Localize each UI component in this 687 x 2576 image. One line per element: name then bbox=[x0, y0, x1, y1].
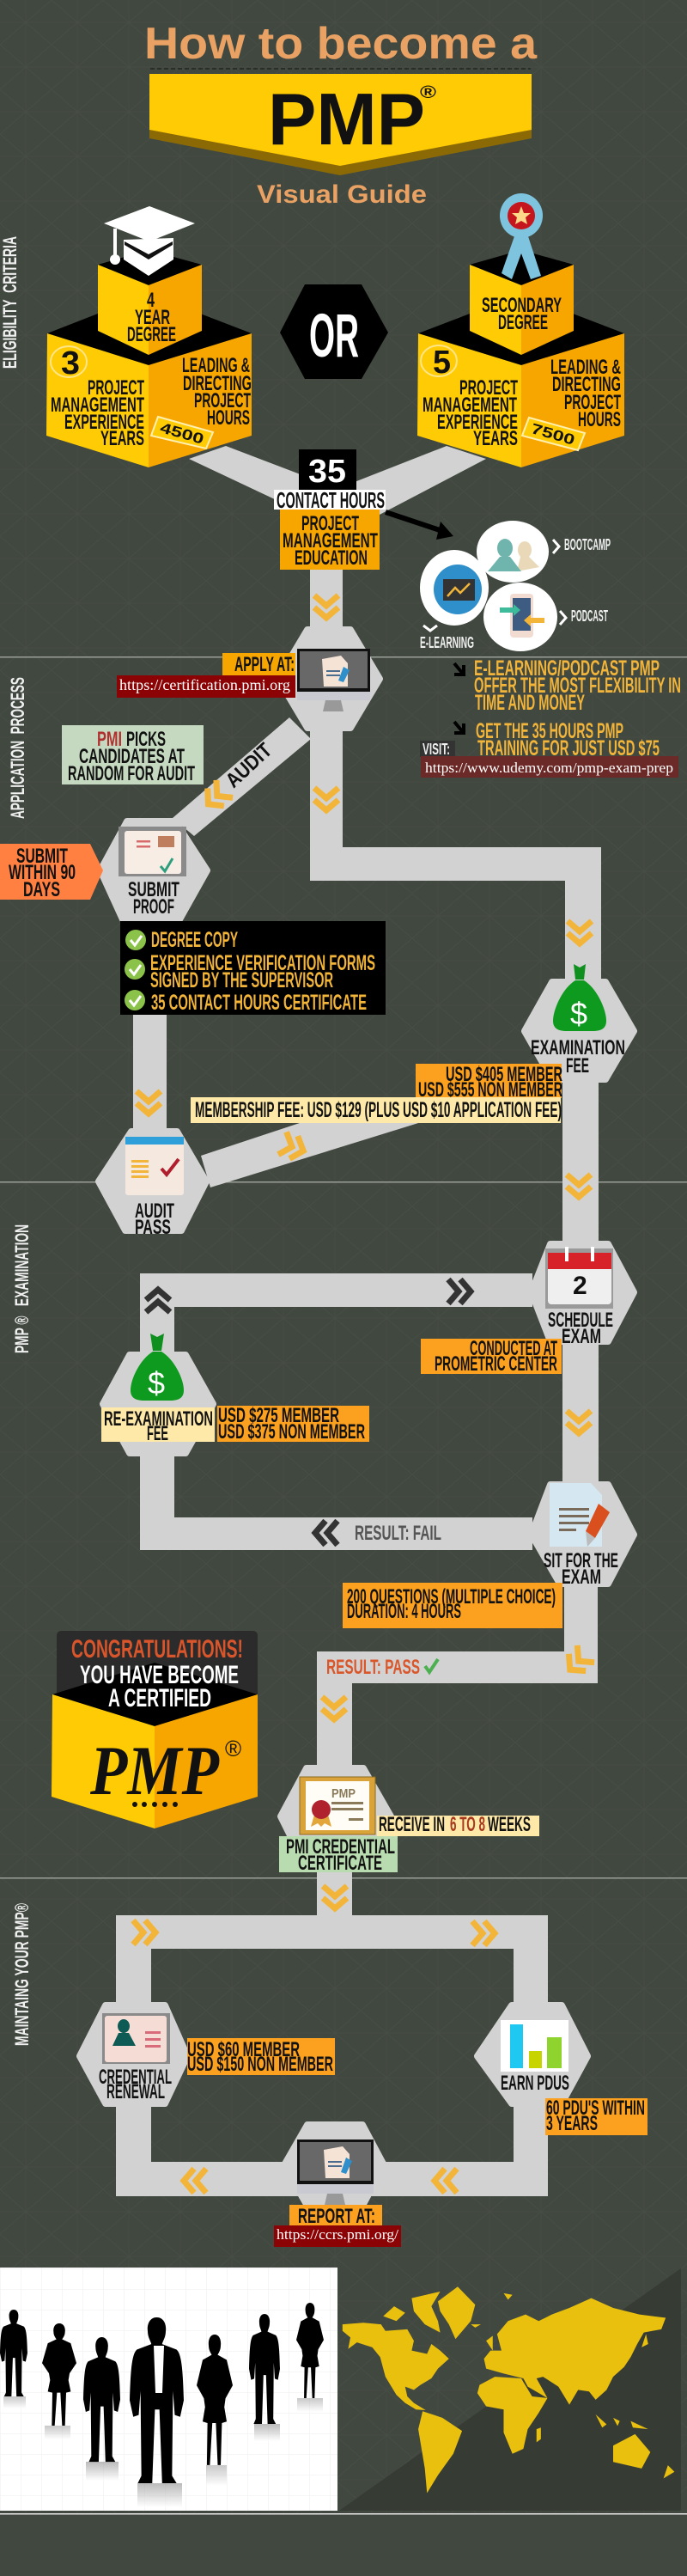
training price note bbox=[454, 719, 660, 760]
hexagon: sit for the exam bbox=[532, 1485, 634, 1584]
cube: secondary degree path: EXPERIENCE bbox=[437, 411, 518, 434]
icon: re-exam money bag: $ bbox=[148, 1365, 165, 1401]
or hexagon: OR bbox=[309, 302, 359, 370]
receive in 6 to 8 weeks box: WEEKS bbox=[488, 1813, 531, 1836]
road: maintenance loop bbox=[116, 1915, 548, 2196]
cube: 4 year degree path: EXPERIENCE bbox=[64, 411, 144, 434]
credential renewal label: RENEWAL bbox=[106, 2080, 165, 2103]
PDU requirement box bbox=[545, 2097, 647, 2135]
cube: 4 year degree path: PROJECT bbox=[88, 376, 144, 400]
ccrs url: https://ccrs.pmi.org/ bbox=[277, 2226, 398, 2243]
road: audit pass to fee bbox=[201, 1117, 438, 1187]
schedule exam label bbox=[548, 1309, 613, 1348]
flexibility note bbox=[454, 656, 681, 715]
audit note box: RANDOM FOR AUDIT bbox=[68, 762, 195, 785]
arrow to training options bbox=[386, 512, 453, 540]
or hexagon bbox=[280, 284, 388, 379]
icon: podcast phone bbox=[500, 594, 544, 638]
congratulations badge: YOU HAVE BECOME bbox=[80, 1661, 239, 1689]
audit note box: CANDIDATES AT bbox=[79, 745, 185, 768]
cube: 4 year degree path: DEGREE bbox=[127, 323, 176, 346]
cube: 4 year degree path: 3 bbox=[61, 345, 80, 382]
receive in 6 to 8 weeks box: 6 TO 8 bbox=[450, 1813, 485, 1836]
chevrons: pass down bbox=[322, 1697, 346, 1719]
chevrons: fee to schedule bbox=[567, 1175, 591, 1197]
hexagon: submit proof bbox=[100, 821, 207, 919]
congratulations badge: PMP bbox=[89, 1731, 220, 1810]
audit pass label bbox=[135, 1199, 174, 1239]
training options cluster bbox=[420, 521, 611, 651]
visit label: VISIT: bbox=[423, 741, 450, 758]
report at label: REPORT AT: bbox=[298, 2205, 375, 2228]
cube: 4 year degree path: YEAR bbox=[135, 306, 170, 329]
congratulations badge: A CERTIFIED bbox=[108, 1684, 211, 1712]
certification url: https://certification.pmi.org bbox=[119, 676, 290, 693]
result fail label: RESULT: FAIL bbox=[355, 1522, 441, 1545]
chevrons: loop top left bbox=[133, 1920, 155, 1944]
cube: secondary degree path: 5 bbox=[433, 345, 451, 381]
icon: submit proof document bbox=[119, 827, 186, 876]
chevrons: retake right bbox=[448, 1279, 471, 1303]
credential renewal label bbox=[99, 2066, 172, 2103]
icon: computer monitor bbox=[297, 649, 370, 711]
subtitle: Visual Guide: Visual Guide bbox=[257, 180, 427, 209]
hexagon: re-examination fee bbox=[103, 1355, 213, 1453]
cube: secondary degree path: YEARS bbox=[473, 427, 518, 450]
road: audit diagonal bbox=[173, 717, 311, 836]
icon: ribbon rosette bbox=[500, 193, 543, 279]
audit note box: PMI bbox=[97, 728, 122, 751]
submit within 90 days tag: DAYS bbox=[23, 878, 60, 901]
chevrons: audit pass to fee bbox=[278, 1132, 307, 1163]
exam fee box bbox=[416, 1063, 562, 1102]
submit within 90 days tag bbox=[0, 844, 103, 901]
cube: 4 year degree path: 4500 bbox=[158, 419, 205, 448]
cube: 4 year degree path: YEARS bbox=[100, 427, 144, 450]
icon: money bag: $ bbox=[570, 996, 587, 1031]
credential renewal label: CREDENTIAL bbox=[99, 2066, 172, 2089]
road: retake loop bbox=[140, 1273, 532, 1550]
sit for the exam label: SIT FOR THE bbox=[544, 1549, 618, 1572]
cube: secondary degree path: PROJECT bbox=[459, 376, 518, 400]
checklist panel: EXPERIENCE VERIFICATION FORMS bbox=[150, 951, 375, 975]
cube: secondary degree path: DIRECTING bbox=[552, 373, 621, 396]
checklist panel: DEGREE COPY bbox=[151, 928, 238, 952]
checklist panel bbox=[120, 921, 386, 1015]
examination fee label: EXAMINATION bbox=[531, 1036, 625, 1059]
cube: 4 year degree path: 4 bbox=[147, 289, 155, 312]
re-examination fee label bbox=[101, 1407, 215, 1445]
chevrons: main flow down bbox=[314, 788, 338, 810]
schedule exam label: SCHEDULE bbox=[548, 1309, 613, 1332]
chevrons: certificate to loop bbox=[323, 1886, 347, 1908]
training options cluster: E-LEARNING bbox=[420, 634, 474, 651]
cube: secondary degree path: 7500 bbox=[529, 420, 576, 449]
submit within 90 days tag: SUBMIT bbox=[16, 845, 68, 868]
exam fee box: USD $405 MEMBER bbox=[446, 1063, 562, 1086]
exam fee box: USD $555 NON MEMBER bbox=[418, 1078, 562, 1102]
submit within 90 days tag: WITHIN 90 bbox=[9, 861, 76, 884]
cube: secondary degree path: SECONDARY bbox=[482, 294, 562, 317]
icon: report monitor bbox=[297, 2140, 374, 2205]
map panel: world map bbox=[339, 2268, 681, 2511]
re-examination fee label: FEE bbox=[147, 1422, 168, 1445]
cube: secondary degree path: MANAGEMENT bbox=[423, 394, 517, 417]
side label: maintaining your PMP: MAINTAING YOUR PMP® bbox=[11, 1903, 33, 2046]
earn PDUs label: EARN PDUS bbox=[501, 2072, 569, 2095]
cube: 4 year degree path: MANAGEMENT bbox=[51, 394, 144, 417]
apply at label: APPLY AT: bbox=[234, 653, 295, 676]
icon: e-learning globe bbox=[434, 565, 482, 614]
cube: secondary degree path: DEGREE bbox=[498, 311, 548, 334]
PMI credential certificate label: CERTIFICATE bbox=[298, 1852, 382, 1875]
icon: bootcamp people bbox=[488, 539, 539, 571]
re-exam price box: USD $275 MEMBER bbox=[218, 1404, 339, 1427]
road: certificate to loop bbox=[317, 1869, 352, 1920]
examination fee label bbox=[531, 1036, 625, 1077]
icon: audit checklist bbox=[125, 1137, 184, 1195]
re-exam price box bbox=[217, 1404, 369, 1444]
cube: secondary degree path: LEADING & bbox=[550, 356, 621, 379]
congratulations badge: CONGRATULATIONS! bbox=[71, 1635, 243, 1663]
icon: money bag bbox=[553, 964, 606, 1031]
result pass label: RESULT: PASS bbox=[326, 1656, 420, 1679]
chevrons: loop top right bbox=[472, 1921, 495, 1945]
road: right vertical to schedule bbox=[562, 1074, 599, 1246]
exam details box: DURATION: 4 HOURS bbox=[347, 1600, 461, 1623]
title banner: PMP: ® bbox=[420, 83, 436, 102]
road: main flow to examination fee bbox=[310, 722, 601, 988]
icon: calendar: 2 bbox=[573, 1272, 587, 1300]
chevrons: result fail bbox=[315, 1521, 337, 1545]
hexagon: report bbox=[284, 2125, 384, 2206]
contact hours badge: CONTACT HOURS bbox=[277, 487, 385, 513]
icon: bar chart bbox=[501, 2020, 568, 2072]
training options cluster: PODCAST bbox=[571, 607, 608, 625]
renewal price box bbox=[187, 2038, 335, 2076]
cube: 4 year degree path: PROJECT bbox=[194, 389, 251, 412]
hexagon: certificate bbox=[281, 1768, 391, 1856]
icon: credential id card bbox=[102, 2013, 170, 2064]
submit proof label bbox=[128, 878, 179, 919]
chevrons: education to apply bbox=[314, 595, 338, 618]
hexagon: earn PDUs bbox=[477, 2005, 587, 2103]
icon: certificate bbox=[300, 1777, 375, 1834]
side label: application process: APPLICATION PROCESS bbox=[7, 677, 28, 819]
contact hours badge: 35 bbox=[308, 454, 346, 490]
prometric box bbox=[421, 1337, 562, 1376]
chevrons: schedule to sit bbox=[567, 1411, 591, 1433]
receive in 6 to 8 weeks box: RECEIVE IN bbox=[379, 1813, 445, 1836]
road: education to apply bbox=[310, 567, 343, 632]
title banner: PMP: PMP bbox=[268, 79, 425, 161]
chevrons: loop bottom left bbox=[184, 2169, 206, 2193]
congratulations badge: ® bbox=[225, 1736, 241, 1761]
exam details box bbox=[343, 1583, 562, 1628]
PMI credential certificate label: PMI CREDENTIAL bbox=[286, 1835, 395, 1859]
cube: secondary degree path bbox=[417, 250, 624, 467]
audit note box: PICKS bbox=[126, 728, 166, 751]
PDU requirement box: 3 YEARS bbox=[546, 2112, 598, 2135]
chevrons: audit bbox=[200, 780, 233, 813]
chevrons: retake up bbox=[146, 1290, 170, 1312]
cube: 4 year degree path: LEADING & bbox=[182, 354, 250, 377]
title banner: PMP bbox=[149, 69, 532, 175]
submit proof label: PROOF bbox=[133, 895, 174, 919]
cube: secondary degree path: PROJECT bbox=[564, 391, 621, 414]
photo panel: business people silhouettes bbox=[0, 2268, 337, 2511]
congratulations badge bbox=[52, 1631, 258, 1828]
hexagon: schedule exam bbox=[532, 1244, 634, 1341]
examination fee label: FEE bbox=[566, 1054, 589, 1077]
submit proof label: SUBMIT bbox=[128, 878, 179, 901]
sit for the exam label bbox=[544, 1549, 618, 1589]
checklist panel: 35 CONTACT HOURS CERTIFICATE bbox=[151, 991, 367, 1015]
schedule exam label: EXAM bbox=[562, 1325, 601, 1348]
chevrons: pass turn bbox=[562, 1645, 594, 1678]
checklist panel: SIGNED BY THE SUPERVISOR bbox=[150, 968, 333, 992]
project management education box: EDUCATION bbox=[295, 546, 368, 570]
chevrons: to examination fee bbox=[568, 921, 592, 943]
road: cubes to contact hours bbox=[189, 446, 486, 516]
project management education box: PROJECT bbox=[301, 512, 359, 535]
audit note box bbox=[62, 725, 204, 785]
renewal price box: USD $60 MEMBER bbox=[187, 2038, 300, 2061]
project management education box bbox=[280, 510, 380, 570]
prometric box: CONDUCTED AT bbox=[470, 1337, 557, 1360]
cube: 4 year degree path: HOURS bbox=[207, 406, 250, 430]
cube: 4 year degree path bbox=[46, 250, 252, 467]
renewal price box: USD $150 NON MEMBER bbox=[187, 2053, 333, 2076]
training options cluster: BOOTCAMP bbox=[564, 536, 611, 553]
audit pass label: PASS bbox=[135, 1216, 171, 1239]
report at label bbox=[289, 2205, 382, 2228]
hexagon: apply bbox=[278, 630, 380, 728]
contact hours badge bbox=[274, 449, 386, 513]
section divider lines bbox=[0, 656, 687, 2514]
PMI credential certificate label bbox=[279, 1835, 398, 1875]
flexibility note: TIME AND MONEY bbox=[475, 691, 585, 715]
audit pass label: AUDIT bbox=[135, 1199, 174, 1223]
project management education box: MANAGEMENT bbox=[283, 529, 378, 552]
sit for the exam label: EXAM bbox=[562, 1566, 601, 1589]
road: pass route bbox=[317, 1581, 598, 1770]
apply at label bbox=[222, 653, 295, 676]
chevrons: loop bottom right bbox=[435, 2169, 457, 2193]
hexagon: examination fee bbox=[525, 982, 634, 1079]
udemy url: https://www.udemy.com/pmp-exam-prep bbox=[425, 760, 673, 776]
icon: exam paper and pencil bbox=[550, 1483, 610, 1547]
cube: 4 year degree path: DIRECTING bbox=[183, 372, 252, 395]
road: schedule to sit bbox=[562, 1340, 599, 1486]
chevrons: to audit pass bbox=[137, 1091, 161, 1114]
re-examination fee label: RE-EXAMINATION bbox=[104, 1407, 213, 1431]
icon: re-exam money bag bbox=[131, 1334, 184, 1401]
hexagon: audit pass bbox=[99, 1132, 206, 1230]
title: How to become a: How to become a bbox=[144, 19, 538, 69]
audit road label: AUDIT bbox=[222, 738, 277, 792]
side label: PMP examination: PMP ® EXAMINATION bbox=[11, 1224, 33, 1353]
prometric box: PROMETRIC CENTER bbox=[435, 1352, 557, 1376]
cube: secondary degree path: HOURS bbox=[578, 408, 621, 431]
icon: calendar bbox=[545, 1247, 613, 1309]
hexagon: credential renewal bbox=[80, 2005, 187, 2103]
icon: certificate: PMP bbox=[331, 1786, 356, 1801]
road: proof to audit pass bbox=[133, 1010, 167, 1134]
icon: graduation cap bbox=[104, 206, 195, 276]
re-exam price box: USD $375 NON MEMBER bbox=[218, 1420, 365, 1444]
